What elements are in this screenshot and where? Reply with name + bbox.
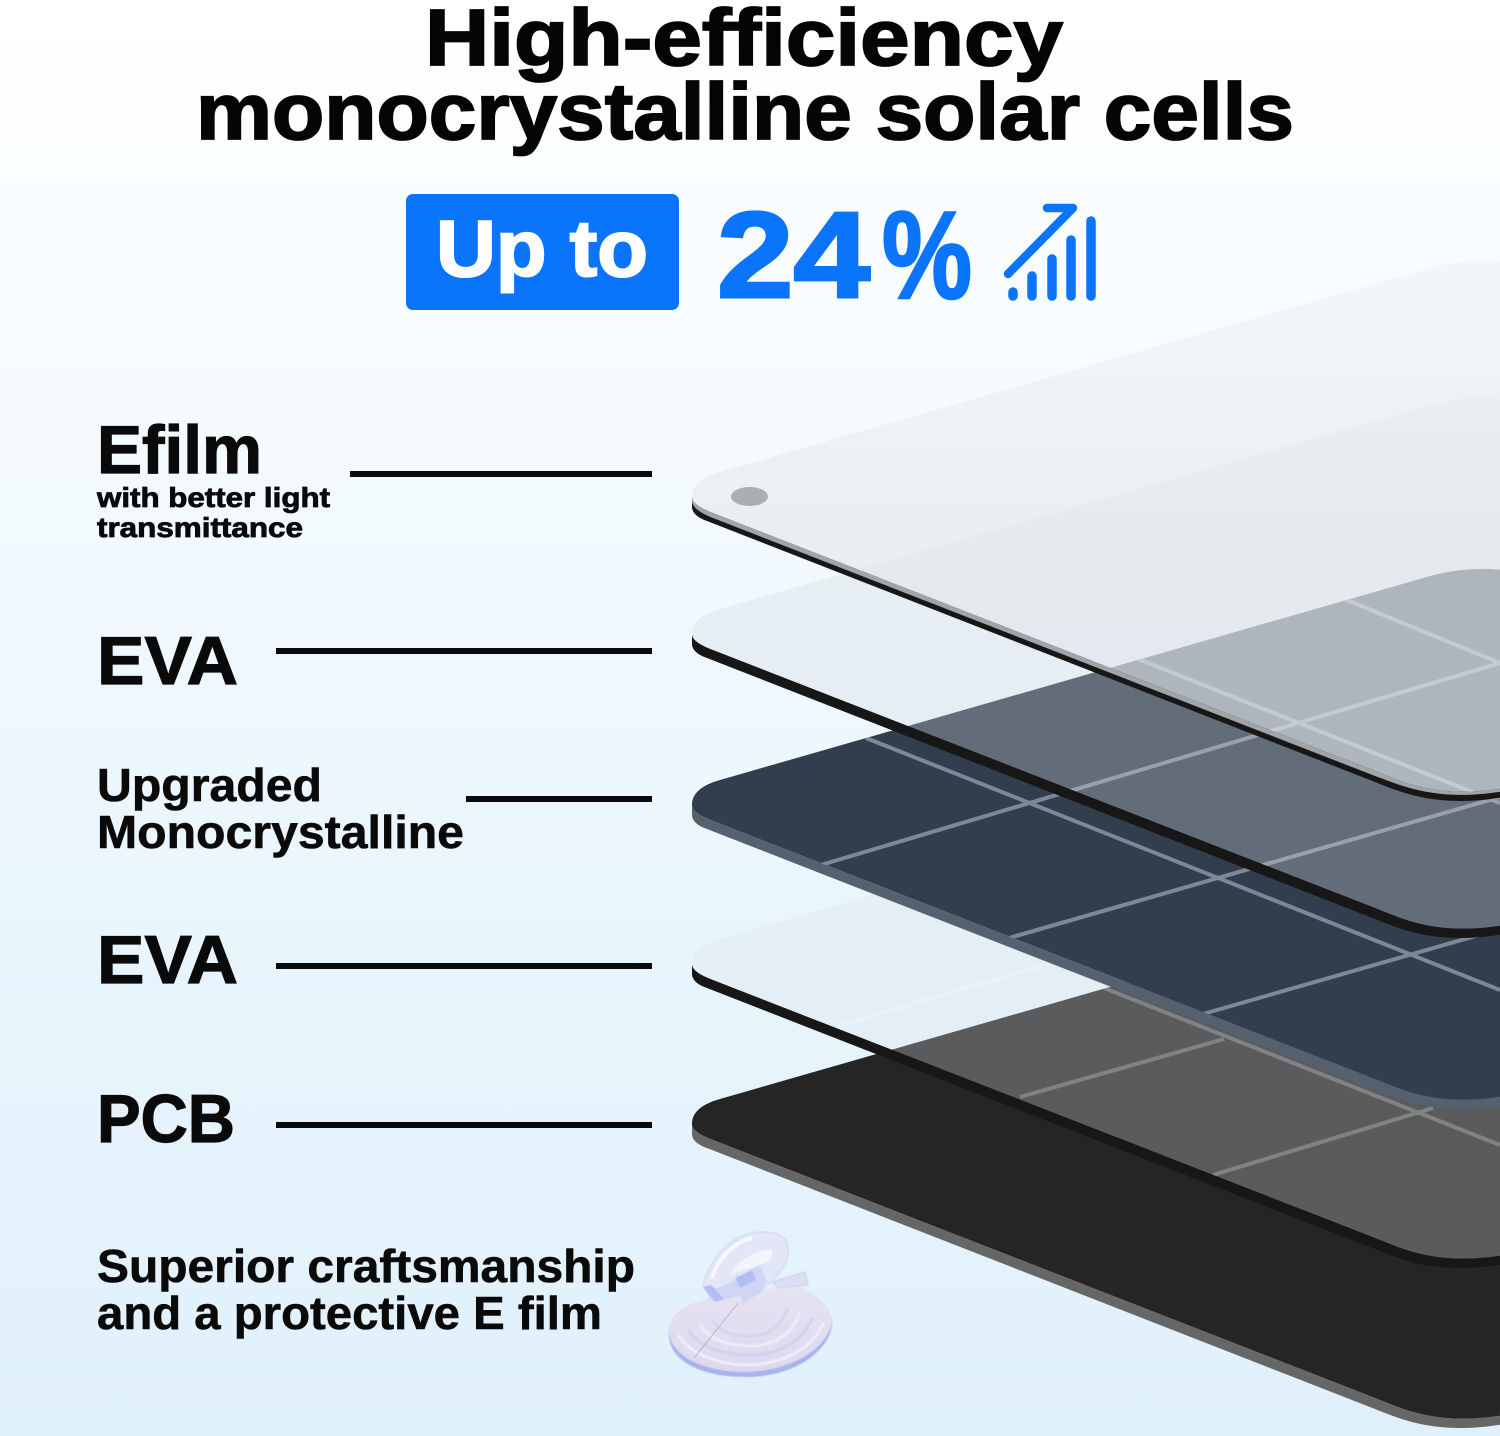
label: upgraded monocrystalline: Upgraded [97, 759, 322, 811]
stat: 24%: % [882, 187, 972, 325]
badge: up to: Up to [436, 204, 648, 293]
caption: craftsmanship [97, 1240, 635, 1339]
label: Efilm: Efilm [97, 412, 262, 488]
leader line: PCB [276, 1122, 652, 1128]
icon: rising bars and arrow [1008, 208, 1091, 296]
label: EVA lower: EVA [97, 922, 238, 998]
leader line: monocrystalline [466, 796, 652, 802]
sheet: lower EVA [692, 728, 1500, 1268]
label: EVA: EVA [97, 623, 238, 699]
title [196, 0, 1294, 156]
sheet: Efilm [692, 261, 1500, 801]
stat: 24%: 24 [717, 187, 870, 323]
caption: craftsmanship: and a protective E film [97, 1287, 602, 1339]
badge: up to [406, 194, 679, 310]
title: monocrystalline solar cells [196, 67, 1294, 156]
grid lines: lower EVA [1020, 988, 1500, 1176]
caption: craftsmanship: Superior craftsmanship [97, 1240, 635, 1292]
sheet: upgraded monocrystalline [692, 569, 1500, 1109]
label: Efilm [96, 412, 330, 543]
stat: 24% [717, 187, 972, 325]
leader line: Efilm [350, 471, 652, 477]
grid lines: monocrystalline cells [821, 598, 1500, 1014]
label: upgraded monocrystalline [97, 759, 464, 858]
mounting hole [731, 487, 768, 506]
layered panel diagram [692, 261, 1500, 1428]
label: upgraded monocrystalline: Monocrystalline [97, 806, 464, 858]
label: Efilm: with better light [96, 482, 330, 513]
sheet: PCB [692, 888, 1500, 1428]
label: PCB: PCB [97, 1081, 235, 1157]
label: Efilm: transmittance [97, 512, 303, 543]
leader line: EVA [276, 648, 652, 654]
icon: suction cup [669, 1232, 832, 1377]
leader line: EVA lower [276, 963, 652, 969]
sheet: upper EVA [692, 398, 1500, 938]
